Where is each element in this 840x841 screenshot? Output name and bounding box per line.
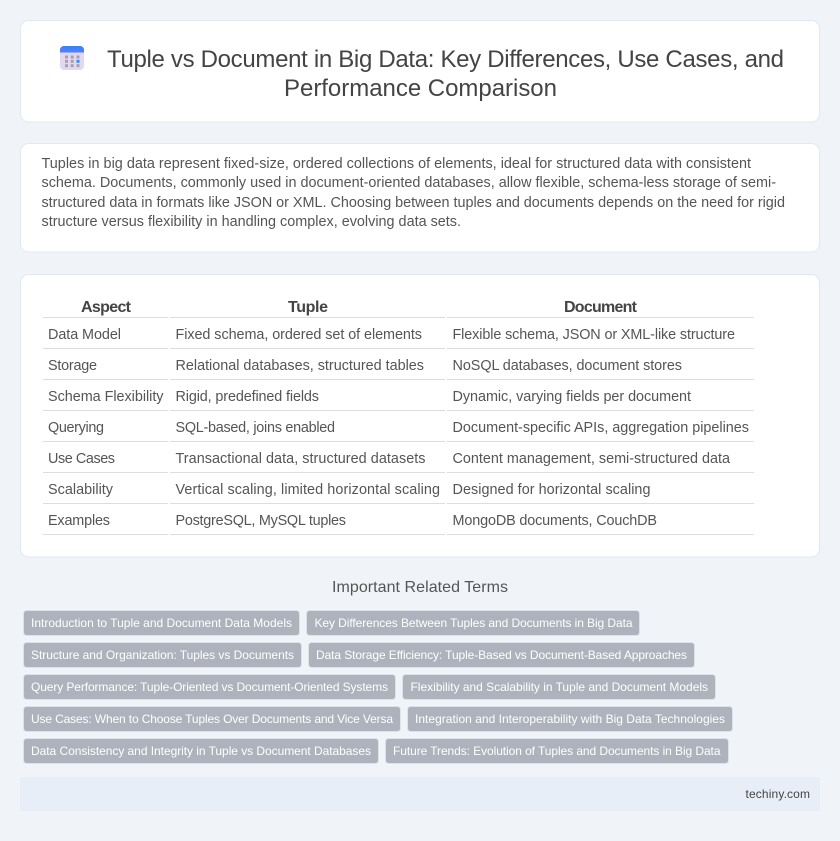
table row: Querying: [43, 420, 754, 442]
table row: Data Model: Flexible schema, JSON or XML-like structure: [452, 327, 735, 343]
table header row: Tuple: [288, 299, 328, 316]
tag: query performance: [24, 674, 396, 700]
tag: data storage efficiency: [308, 642, 694, 668]
table row: Scalability: Designed for horizontal scaling: [452, 482, 650, 498]
tag: future trends: [386, 738, 728, 764]
table row: Schema Flexibility: Schema Flexibility: [48, 389, 164, 405]
table row: Storage: Storage: [48, 358, 97, 374]
table row: Examples: [43, 513, 754, 535]
table row: Examples: Examples: [48, 513, 110, 529]
panel: introduction text: [20, 144, 820, 252]
text block: summary paragraph: Tuples in big data represent fixed-size, ordered collections of elements, ideal for structured data with consistent: [42, 156, 751, 172]
table row: Examples: PostgreSQL, MySQL tuples: [176, 513, 346, 529]
icon: calendar grid: [60, 46, 84, 70]
table header row: Document: [564, 299, 638, 316]
footer: techiny.com: [746, 787, 810, 801]
tag: key differences: [306, 610, 640, 636]
tag: flexibility and scalability: Flexibility and Scalability in Tuple and Document Models: [410, 680, 708, 694]
table row: Schema Flexibility: [43, 389, 754, 411]
text block: summary paragraph: structure versus flexibility in handling complex, evolving data sets.: [42, 214, 461, 230]
title: [107, 46, 784, 102]
table row: Storage: NoSQL databases, document stores: [452, 358, 682, 374]
table header row: Aspect: [81, 299, 132, 316]
table row: Schema Flexibility: Dynamic, varying fields per document: [452, 389, 691, 405]
table row: Storage: Relational databases, structured tables: [176, 358, 424, 374]
tag: flexibility and scalability: [402, 674, 716, 700]
tag: query performance: Query Performance: Tuple-Oriented vs Document-Oriented Systems: [31, 680, 388, 694]
tag: integration: [408, 706, 732, 732]
table row: Data Model: [43, 327, 754, 349]
tag: structure and organization: [24, 642, 302, 668]
table row: Scalability: Vertical scaling, limited horizontal scaling: [176, 482, 440, 498]
title: Performance Comparison: [284, 75, 557, 102]
table row: Querying: Querying: [48, 420, 104, 436]
table row: Use Cases: Content management, semi-structured data: [452, 451, 730, 467]
table row: Querying: SQL-based, joins enabled: [176, 420, 335, 436]
tag: use cases: [24, 706, 400, 732]
table row: Use Cases: Use Cases: [48, 451, 115, 467]
table row: Querying: Document-specific APIs, aggregation pipelines: [452, 420, 749, 436]
panel: header: [20, 20, 820, 122]
tag: use cases: Use Cases: When to Choose Tuples Over Documents and Vice Versa: [31, 712, 393, 726]
table row: Data Model: Data Model: [48, 327, 121, 343]
tag: key differences: Key Differences Between Tuples and Documents in Big Data: [314, 616, 633, 630]
tag: future trends: Future Trends: Evolution of Tuples and Documents in Big Data: [393, 744, 721, 758]
table header row: [43, 299, 754, 318]
table row: Examples: MongoDB documents, CouchDB: [452, 513, 657, 529]
tag: data storage efficiency: Data Storage Efficiency: Tuple-Based vs Document-Based Approaches: [316, 648, 687, 662]
panel: comparison table: [20, 274, 820, 557]
tag: integration: Integration and Interoperability with Big Data Technologies: [415, 712, 725, 726]
table row: Schema Flexibility: Rigid, predefined fields: [176, 389, 319, 405]
table row: Data Model: Fixed schema, ordered set of elements: [176, 327, 422, 343]
tag: data consistency: Data Consistency and Integrity in Tuple vs Document Databases: [31, 744, 371, 758]
table row: Storage: [43, 358, 754, 380]
table row: Scalability: [43, 482, 754, 504]
heading: related terms: Important Related Terms: [332, 579, 508, 596]
tag: introduction: Introduction to Tuple and Document Data Models: [31, 616, 292, 630]
panel: related term tags: [24, 610, 732, 764]
footer: [20, 777, 820, 811]
tag: data consistency: [24, 738, 378, 764]
table row: Use Cases: [43, 451, 754, 473]
text block: summary paragraph: structured data in formats like JSON or XML. Choosing between tuples and documents depends on the need for rigid: [42, 195, 785, 211]
tag: structure and organization: Structure and Organization: Tuples vs Documents: [31, 648, 294, 662]
table row: Use Cases: Transactional data, structured datasets: [176, 451, 426, 467]
text block: summary paragraph: schema. Documents, commonly used in document-oriented databases, allow flexible, schema-less storage of semi-: [42, 175, 776, 191]
tag: introduction: [24, 610, 300, 636]
title: Tuple vs Document in Big Data: Key Differences, Use Cases, and: [107, 46, 784, 73]
table row: Scalability: Scalability: [48, 482, 114, 498]
text block: summary paragraph: [42, 156, 785, 230]
